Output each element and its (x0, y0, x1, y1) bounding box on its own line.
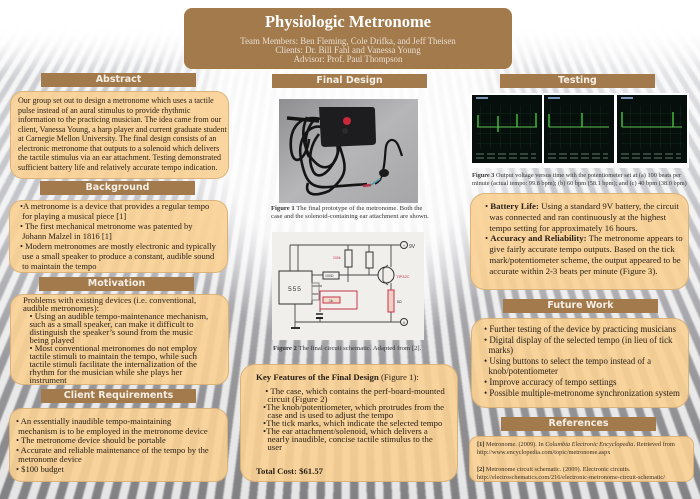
heading: testing (500, 74, 655, 88)
heading: testing: Testing (558, 75, 597, 86)
panel: motivation (10, 294, 229, 385)
figure 2: circuit schematic (272, 232, 424, 340)
panel: references: [1] Metronome. (2009). In Columbia Electronic Encyclopedia. Retrieved from (477, 441, 675, 448)
panel: background: • Modern metronomes are mostly electronic and typically (20, 241, 216, 251)
panel: key features: user (267, 442, 282, 452)
panel: key features: • The case, which contains the perf-board-mounted (265, 386, 445, 396)
heading: future work: Future Work (547, 300, 614, 311)
panel: motivation: tactile stimuli facilitate the internalization of the (30, 359, 197, 369)
panel: motivation: Problems with existing devices (i.e. conventional, (23, 295, 196, 305)
figure 2 caption: Figure 2 The final circuit schematic. Adapted from [2]. (273, 345, 421, 352)
panel: testing results: give fairly accurate tempo outputs. Based on the tick (489, 244, 675, 254)
heading: motivation (39, 277, 194, 291)
panel: client requirements: metronome device (18, 454, 82, 464)
heading: motivation: Motivation (88, 278, 145, 289)
panel: motivation: tactile stimuli to maintain the tempo, while such (30, 351, 197, 361)
panel: background: • The first mechanical metronome was patented by (20, 221, 193, 231)
panel: key features: case and is used to adjust the tempo (267, 410, 393, 420)
panel: motivation: audible metronomes): (23, 303, 99, 313)
heading: client requirements (41, 389, 196, 403)
panel: motivation: • Most conventional metronomes do not employ (30, 343, 197, 353)
figure 3 caption: Figure 3 Output voltage versus time with the potentiometer set at (a) 100 beats per (472, 172, 681, 178)
panel: motivation: being played (30, 335, 74, 345)
panel: key features: circuit (Figure 2) (267, 394, 328, 404)
heading: background: Background (86, 182, 149, 193)
figure 2: circuit schematic: + (403, 243, 406, 248)
figure 2: circuit schematic: 100Ω (325, 274, 334, 278)
panel: client requirements: • $100 budget (16, 464, 64, 474)
panel: background: use a small speaker to produce a constant, audible sound (22, 251, 214, 261)
panel: client requirements: mechanism is to be employed in the metronome device (18, 426, 208, 436)
panel: background: •A metronome is a device that provides a regular tempo (20, 201, 209, 211)
panel: testing results: mark/potentiometer scheme, the output appeared to be (489, 255, 681, 265)
panel: references: [2] Metronome circuit schematic. (2009). Electronic circuits. (477, 466, 630, 473)
panel: motivation: distinguish the speaker’s sound from the music (30, 327, 193, 337)
panel: testing results: accurate within 2-3 beats per minute (Figure 3). (489, 266, 657, 276)
panel: abstract: electronic metronome that outputs to a solenoid which delivers (18, 144, 219, 153)
heading: future work (503, 299, 658, 313)
panel: testing results: • Battery Life: Using a standard 9V battery, the circuit (485, 201, 679, 211)
panel: client requirements: • Accurate and reliable maintenance of the tempo by the (16, 445, 209, 455)
figure 2: circuit schematic: 8Ω (397, 300, 402, 304)
panel: motivation: • Using an audible tempo-maintenance mechanism, (30, 311, 208, 321)
heading: background (40, 181, 195, 195)
panel: client requirements (9, 408, 228, 482)
panel: key features: Total Cost: $61.57 (256, 466, 323, 476)
panel: motivation: such as a small speaker, can make it difficult to (30, 319, 194, 329)
heading: references: References (549, 418, 608, 429)
panel: abstract: Our group set out to design a metronome which uses a tactile (18, 96, 214, 105)
panel: motivation: rhythm for the musician while she plays her (30, 367, 182, 377)
panel: future work (471, 318, 689, 408)
heading: client requirements: Client Requirements (64, 390, 173, 401)
team and advisors: Clients: Dr. Bill Fahl and Vanessa Young (275, 45, 421, 55)
panel: references: http://electroschematics.com/216/electronic-metronome-circuit-schematic/ (477, 474, 665, 481)
panel: future work: knob/potentiometer (488, 366, 558, 376)
panel: testing results: tempo setting for approximately 16 hours. (489, 223, 637, 233)
figure 2: circuit schematic: 555 (288, 286, 302, 293)
panel: key features: Key Features of the Final Design (Figure 1): (256, 372, 419, 382)
panel: client requirements: • An essentially inaudible tempo-maintaining (16, 416, 171, 426)
panel: abstract: at Carnegie Mellon University. The final design consists of an (18, 134, 216, 143)
heading: abstract (41, 73, 196, 87)
team and advisors: Team Members: Ben Fleming, Cole Drifka, and Jeff Theisen (240, 36, 456, 46)
figure 1: metronome photo (279, 99, 418, 203)
panel: future work: marks) (488, 345, 513, 355)
panel: background: for playing a musical piece [1] (22, 211, 126, 221)
panel: testing results (470, 193, 689, 290)
panel: key features: •The tick marks, which indicate the selected tempo (263, 418, 442, 428)
panel: abstract: pulse instead of an aural stimulus to provide rhythmic (18, 106, 190, 115)
team and advisors: Advisor: Prof. Paul Thompson (294, 54, 402, 64)
figure 2: circuit schematic: 1k (329, 299, 333, 303)
panel: motivation: instrument (30, 375, 67, 385)
panel: testing results: was connected and ran continuously at the highest (489, 212, 666, 222)
panel: references (469, 436, 694, 482)
title banner (184, 8, 512, 69)
figure 2: circuit schematic: 200k (333, 256, 341, 260)
figure 3 caption (472, 172, 687, 187)
figure 1 caption: case and the solenoid-containing ear attachment are shown. (271, 213, 429, 220)
panel: future work: • Using buttons to select the tempo instead of a (484, 356, 651, 366)
figure 1 caption: Figure 1 The final prototype of the metronome. Both the (271, 205, 422, 212)
heading: final design: Final Design (316, 75, 383, 86)
panel: key features (240, 364, 458, 482)
panel: background: Johann Malzel in 1816 [1] (22, 231, 112, 241)
panel: future work: • Possible multiple-metronome synchronization system (484, 388, 680, 398)
panel: abstract: the tactile stimulus via an ear attachment. Testing demonstrated (18, 153, 221, 162)
panel: testing results: • Accuracy and Reliability: The metronome appears to (485, 233, 683, 243)
title: Physiologic Metronome (265, 12, 431, 31)
figure 3 caption: minute (actual tempo: 99.8 bpm); (b) 60 bpm (58.1 bpm); and (c) 40 bpm (38.0 bpm) (472, 180, 687, 187)
panel: abstract: client, Vanessa Young, a harp player and current graduate student (18, 125, 227, 134)
panel: key features: •The knob/potentiometer, which protrudes from the (263, 402, 444, 412)
panel: abstract (10, 91, 229, 179)
panel: client requirements: • The metronome device should be portable (16, 435, 166, 445)
panel: future work: • Improve accuracy of tempo settings (484, 377, 616, 387)
heading: abstract: Abstract (96, 74, 141, 85)
panel: references: http://www.encyclopedia.com/topic/metronome.aspx (477, 449, 610, 456)
panel: key features: •The ear attachment/solenoid, which delivers a (263, 426, 428, 436)
heading: final design (272, 74, 427, 88)
figure 2: circuit schematic: 9V (409, 244, 416, 250)
panel: abstract: information to the practicing musician. The idea came from our (18, 115, 221, 124)
panel: background (9, 200, 228, 273)
panel: key features: nearly inaudible, concise tactile stimulus to the (267, 434, 433, 444)
figure 2: circuit schematic: TIP32C (396, 274, 410, 279)
panel: background: to maintain the tempo (22, 261, 96, 271)
team and advisors (240, 36, 456, 64)
panel: future work: • Digital display of the selected tempo (in lieu of tick (484, 335, 672, 345)
figure 3: oscilloscope traces (472, 93, 689, 168)
panel: abstract: sufficient battery life and relatively accurate tempo indication. (18, 163, 217, 172)
panel: future work: • Further testing of the device by practicing musicians (484, 324, 676, 334)
figure 2: circuit schematic: 0 (403, 320, 406, 325)
figure 1 caption (271, 205, 429, 220)
heading: references (501, 417, 656, 431)
